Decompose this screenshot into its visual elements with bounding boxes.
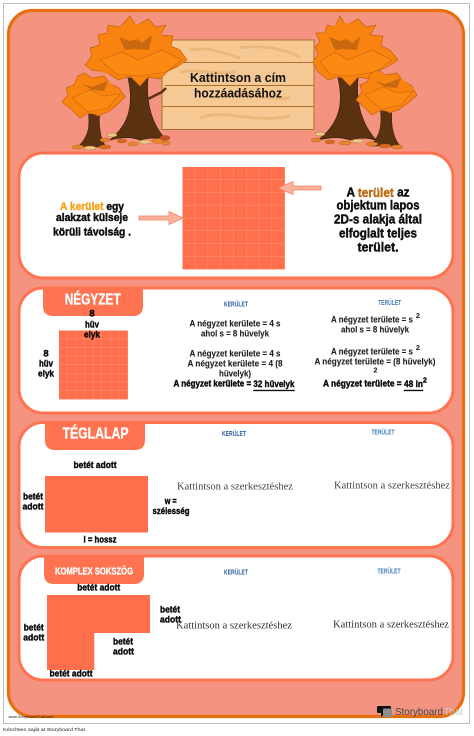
footer credit: Készítsen saját at Storyboard That [3, 727, 86, 732]
perimeter definition [53, 201, 131, 238]
perimeter formulas: ahol s = 8 hüvelyk [201, 328, 270, 340]
left label [23, 622, 45, 644]
right label [160, 604, 182, 626]
site url: www.StoryboardThat.com [8, 714, 54, 719]
area placeholder: Kattintson a szerkesztéshez [333, 620, 450, 630]
right label: szélesség [152, 506, 190, 517]
wooden sign [162, 40, 314, 130]
right label: w = [164, 496, 177, 507]
perimeter formulas [174, 318, 295, 390]
left big tree [85, 16, 187, 140]
left side label [38, 348, 55, 380]
area heading: TERÜLET [378, 298, 402, 307]
area heading: TERÜLET [378, 566, 401, 576]
perimeter formulas: A négyzet kerülete = 32 hüvelyk [174, 378, 295, 390]
area placeholder: Kattintson a szerkesztéshez [334, 480, 451, 492]
area definition: elfoglalt teljes [339, 226, 417, 240]
area definition: objektum lapos [336, 198, 420, 212]
rectangle figure [45, 476, 148, 532]
perimeter formulas: A négyzet kerülete = 4 s [190, 348, 280, 360]
header: trees and sign [62, 16, 417, 150]
arrow: area [278, 182, 321, 194]
panel: definitions [19, 153, 453, 278]
right big tree [313, 16, 398, 140]
area formulas: ahol s = 8 hüvelyk [341, 324, 410, 336]
bottom label: betét adott [50, 668, 93, 680]
inner label: betét [113, 636, 134, 648]
wooden sign: hozzáadásához [194, 86, 282, 100]
area formulas: 2 [374, 368, 378, 374]
logo: Storyboard That [377, 706, 463, 718]
area definition [334, 184, 422, 254]
perimeter placeholder: Kattintson a szerkesztéshez [176, 620, 293, 632]
area formulas: A négyzet területe = 48 in [323, 378, 423, 390]
area formulas: A négyzet területe = s [331, 346, 413, 358]
area formulas: 2 [416, 313, 420, 320]
area definition: A terület az [346, 184, 410, 200]
bottom label: l = hossz [84, 534, 117, 546]
perimeter formulas: A négyzet kerülete = 4 s [190, 318, 280, 330]
logo: Storyboard That: Storyboard [395, 706, 443, 718]
area formulas [314, 313, 436, 390]
top side label: hüv [85, 320, 100, 330]
right label: adott [160, 614, 182, 626]
left label: betét [23, 492, 44, 502]
top side label [84, 308, 101, 340]
left label: betét [24, 622, 44, 634]
panel: complex polygon [19, 556, 453, 680]
right small tree [356, 70, 417, 146]
area heading: TERÜLET [372, 428, 395, 436]
grid square [182, 167, 285, 270]
area formulas: 2 [423, 378, 427, 384]
sign title: Kattintson a cím [190, 71, 286, 85]
perimeter definition: alakzat külseje [56, 212, 128, 224]
perimeter heading: KERÜLET [224, 300, 249, 308]
inner label [113, 636, 135, 658]
left side label: 8 [43, 348, 49, 360]
left side label: hüv [39, 358, 54, 370]
left side label: elyk [38, 368, 55, 380]
inner label: adott [113, 646, 135, 658]
tab heading [45, 423, 145, 450]
logo: Storyboard That: That [444, 706, 463, 718]
top label: betét adott [77, 582, 121, 594]
perimeter definition: A kerület egy [60, 201, 125, 213]
tab heading [44, 557, 144, 584]
panel: rectangle [19, 422, 453, 548]
panel: square [19, 288, 453, 413]
area formulas: 2 [416, 345, 420, 352]
L-shaped figure [47, 595, 150, 670]
left label: adott [23, 632, 45, 644]
square figure [59, 330, 128, 400]
left small tree [62, 73, 125, 147]
tab heading: TÉGLALAP [62, 424, 129, 442]
fallen leaves [72, 132, 403, 150]
tab heading [43, 288, 143, 316]
perimeter formulas: hüvelyk) [219, 368, 251, 380]
top label: betét adott [74, 460, 117, 471]
perimeter heading: KERÜLET [222, 429, 247, 438]
perimeter definition: körüli távolság . [53, 226, 131, 238]
perimeter heading: KERÜLET [224, 568, 249, 576]
left label: adott [22, 502, 44, 512]
left label [22, 492, 44, 512]
top side label: 8 [89, 308, 95, 320]
perimeter placeholder: Kattintson a szerkesztéshez [177, 482, 294, 492]
perimeter formulas: A négyzet kerülete = 4 (8 [188, 358, 282, 370]
area definition: 2D-s alakja által [334, 212, 422, 226]
tab heading: KOMPLEX SOKSZÖG [55, 564, 133, 578]
tab heading: NÉGYZET [65, 290, 121, 308]
right label [152, 496, 190, 517]
area definition: terület. [358, 240, 398, 254]
right label: betét [160, 604, 181, 616]
arrow: perimeter [139, 212, 183, 224]
area formulas: A négyzet területe = s [331, 314, 413, 326]
area formulas: A négyzet területe = (8 hüvelyk) [314, 356, 436, 368]
top side label: elyk [84, 330, 101, 340]
